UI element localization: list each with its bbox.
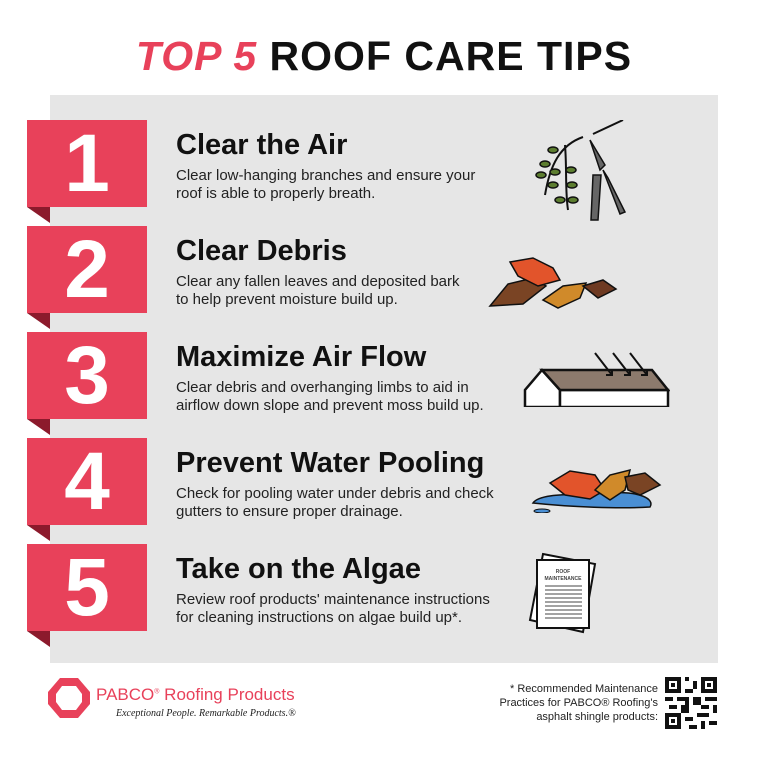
tip 2 text — [176, 273, 460, 308]
tip 1 number: 1 — [64, 118, 110, 209]
tip 1 heading: Clear the Air — [176, 129, 347, 161]
title: TOP 5 ROOF CARE TIPS — [136, 33, 632, 79]
tip 2 number — [27, 226, 147, 313]
tip 2 number: 2 — [64, 224, 110, 315]
tip 4 heading: Prevent Water Pooling — [176, 447, 484, 479]
logo: PABCO: PABCO® Roofing Products — [96, 685, 295, 704]
tip 4 text: gutters to ensure proper drainage. — [176, 503, 403, 520]
tip 5 text: Review roof products' maintenance instructions — [176, 591, 490, 608]
icon: roof maintenance document: MAINTENANCE — [545, 576, 582, 582]
tip 2 text: Clear any fallen leaves and deposited bark — [176, 273, 460, 290]
tip 1 text — [176, 167, 476, 202]
tip 3 text: airflow down slope and prevent moss build up. — [176, 397, 484, 414]
tip 4 text: Check for pooling water under debris and check — [176, 485, 494, 502]
QR code — [665, 677, 717, 729]
tip 3 text: Clear debris and overhanging limbs to aid in — [176, 379, 469, 396]
tip 5 text: for cleaning instructions on algae build up*. — [176, 609, 462, 626]
tip 1 text: roof is able to properly breath. — [176, 185, 375, 202]
tip 5 text — [176, 591, 490, 626]
icon: house with airflow arrows — [524, 352, 670, 407]
panel: tips background — [50, 95, 718, 663]
tip 3 text — [176, 379, 484, 414]
icon: fallen leaves — [488, 257, 618, 309]
icon: leaves in water — [532, 469, 662, 513]
tip 2 text: to help prevent moisture build up. — [176, 291, 398, 308]
tip 1 number — [27, 120, 147, 207]
tip 3 heading: Maximize Air Flow — [176, 341, 426, 373]
tip 5 heading: Take on the Algae — [176, 553, 421, 585]
logo: PABCO: Exceptional People. Remarkable Products.® — [116, 708, 296, 719]
icon: roof maintenance document: ROOF — [556, 569, 570, 575]
icon: roof maintenance document — [528, 552, 596, 634]
tip 4 number: 4 — [64, 436, 110, 527]
footnote: * Recommended Maintenance Practices for PABCO® Roofing's asphalt shingle products: — [499, 683, 658, 723]
tip 4 text — [176, 485, 494, 520]
tip 5 number: 5 — [64, 542, 110, 633]
tip 1 text: Clear low-hanging branches and ensure your — [176, 167, 475, 184]
logo: PABCO — [48, 678, 296, 719]
icon: branch and pruners — [535, 120, 626, 221]
tip 2 heading: Clear Debris — [176, 235, 347, 267]
tip 5 number — [27, 544, 147, 631]
tip 4 number — [27, 438, 147, 525]
tip 3 number — [27, 332, 147, 419]
tip 3 number: 3 — [64, 330, 110, 421]
